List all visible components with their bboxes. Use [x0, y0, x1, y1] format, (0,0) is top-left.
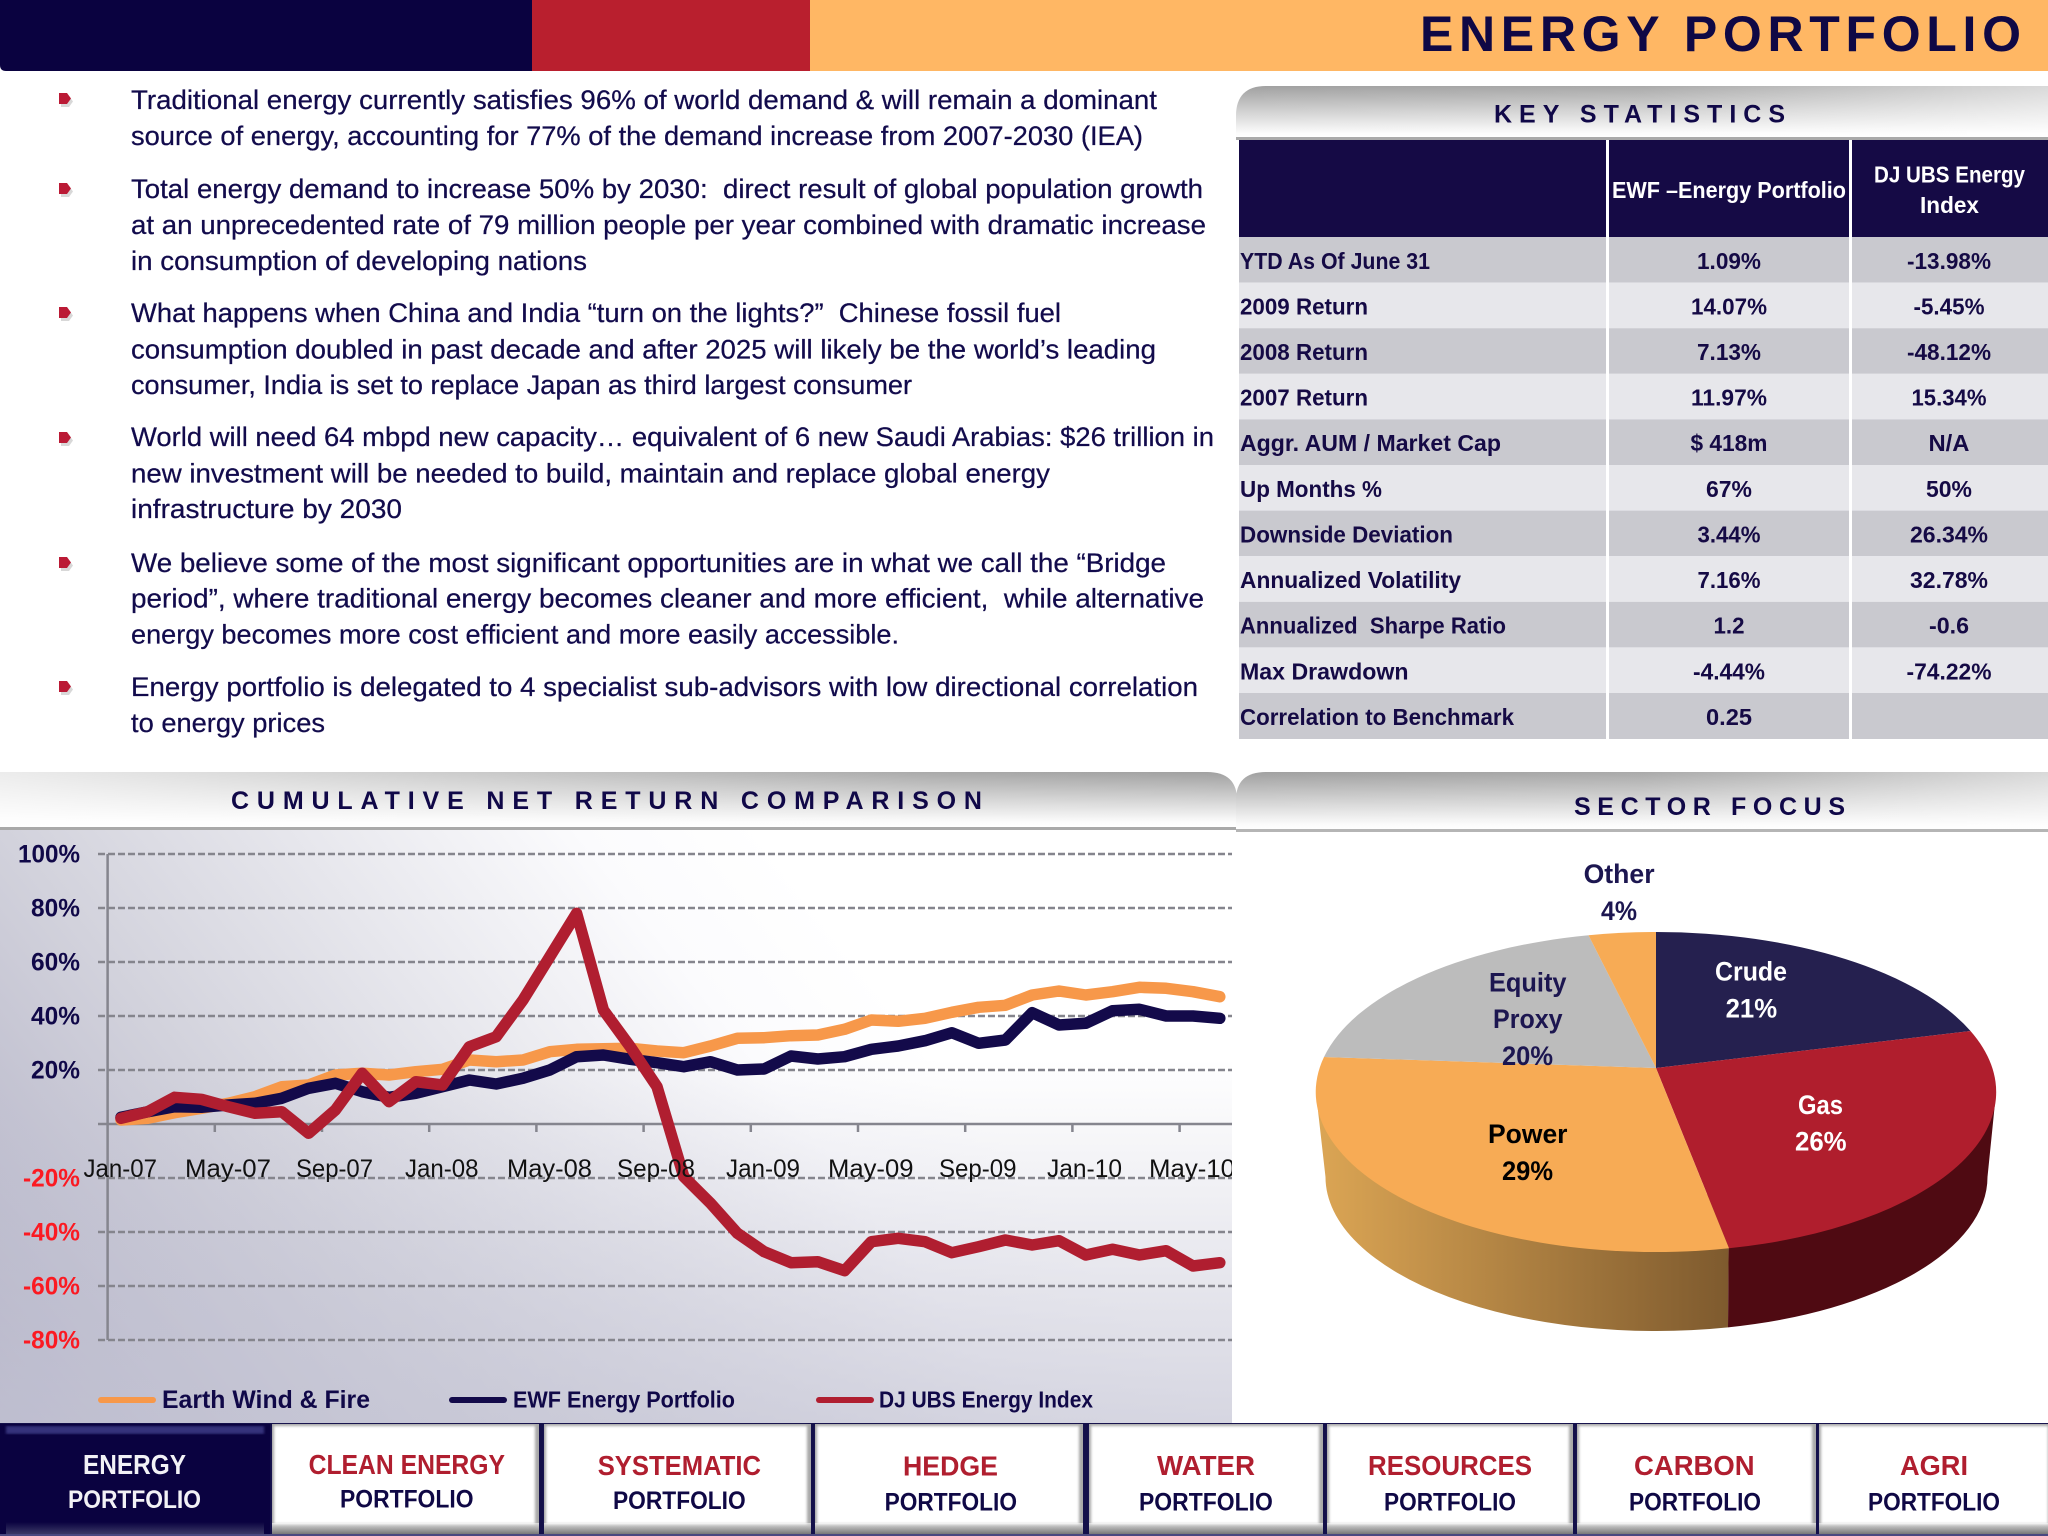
bullet 3	[59, 298, 1156, 400]
label: gas: 26%	[1795, 1127, 1847, 1157]
row: 2008 return: 2008 Return	[1240, 339, 1368, 365]
y axis labels: -60%	[23, 1272, 80, 1300]
button: carbon: PORTFOLIO	[1629, 1489, 1761, 1517]
panel: sector focus header: SECTOR FOCUS	[1574, 793, 1845, 821]
row: 2009 return	[1240, 294, 1984, 320]
bullet 5: energy becomes more cost efficient and more easily accessible.	[131, 620, 899, 650]
title: ENERGY PORTFOLIO	[1420, 6, 2021, 62]
series: Earth Wind & Fire	[121, 987, 1220, 1120]
x axis labels: May-10	[1149, 1155, 1235, 1183]
legend: EWF Energy Portfolio	[513, 1386, 735, 1412]
label: equity proxy	[1489, 968, 1566, 1071]
y axis labels: 40%	[31, 1002, 80, 1030]
x axis labels: May-07	[185, 1155, 271, 1183]
button: energy (active)	[0, 1424, 270, 1534]
button: clean energy	[272, 1424, 539, 1534]
button: clean energy: PORTFOLIO	[340, 1486, 474, 1514]
row: correlation: 0.25	[1706, 704, 1752, 730]
row: up months: 50%	[1926, 476, 1972, 502]
bullet 3: consumer, India is set to replace Japan as third largest consumer	[131, 370, 912, 400]
y axis labels: -40%	[23, 1218, 80, 1246]
label: crude: Crude	[1715, 957, 1787, 987]
button: systematic: SYSTEMATIC	[598, 1450, 761, 1481]
button: hedge: HEDGE	[903, 1451, 998, 1482]
row: drawdown: -4.44%	[1693, 658, 1765, 684]
bullet 1: Traditional energy currently satisfies 96% of world demand & will remain a dominant	[131, 85, 1158, 115]
row: 2008 return	[1240, 339, 1991, 365]
row: AUM: N/A	[1928, 430, 1970, 456]
slice: equity proxy	[1324, 935, 1656, 1068]
y axis labels: 80%	[31, 894, 80, 922]
x axis labels: Sep-08	[617, 1155, 695, 1183]
row: AUM	[1240, 430, 1970, 456]
label: equity proxy: Proxy	[1493, 1004, 1563, 1034]
bullet 1	[59, 85, 1158, 151]
panel: key statistics table	[1239, 140, 2048, 739]
panel: cumulative net return header	[0, 772, 1237, 830]
x axis labels: Jan-07	[84, 1155, 157, 1183]
row: 2008 return: -48.12%	[1907, 339, 1991, 365]
row: sharpe: 1.2	[1714, 612, 1744, 638]
button: hedge: PORTFOLIO	[885, 1489, 1017, 1517]
row: 2009 return: 14.07%	[1691, 294, 1767, 320]
slice: power	[1316, 1057, 1729, 1252]
table header: Index	[1920, 192, 1979, 218]
header band	[0, 0, 2048, 71]
row: drawdown: -74.22%	[1906, 658, 1992, 684]
row: sharpe: Annualized Sharpe Ratio	[1240, 612, 1506, 638]
slice: gas	[1656, 1031, 1996, 1248]
row: YTD: 1.09%	[1697, 248, 1761, 274]
button: carbon: CARBON	[1634, 1450, 1755, 1481]
row: 2007 return	[1240, 385, 1986, 411]
slice: crude	[1656, 932, 1970, 1068]
button: agri: PORTFOLIO	[1868, 1489, 2000, 1517]
bullet 1: source of energy, accounting for 77% of the demand increase from 2007-2030 (IEA)	[131, 121, 1143, 151]
row: downside deviation: 3.44%	[1698, 521, 1760, 547]
pie side: power	[1316, 1093, 1729, 1331]
label: gas: Gas	[1798, 1090, 1843, 1120]
panel: key statistics header: KEY STATISTICS	[1494, 101, 1785, 129]
button: energy (active): ENERGY	[83, 1449, 186, 1480]
table header	[1239, 140, 2048, 237]
navigation bar	[0, 1423, 2048, 1536]
y axis labels: 100%	[18, 840, 80, 868]
panel: cumulative net return header: CUMULATIVE NET RETURN COMPARISON	[231, 787, 982, 815]
button: hedge	[815, 1424, 1083, 1534]
bullet 5: period”, where traditional energy becomes cleaner and more efficient, while alternative	[131, 584, 1204, 614]
button: agri	[1819, 1424, 2048, 1534]
label: other	[1584, 859, 1655, 926]
bullet 4: infrastructure by 2030	[131, 494, 402, 524]
label: gas	[1795, 1090, 1847, 1157]
panel: key statistics header	[1236, 86, 2048, 140]
row: YTD: YTD As Of June 31	[1240, 248, 1430, 274]
slice: other	[1588, 932, 1656, 1068]
row: YTD	[1240, 248, 1991, 274]
legend: DJ UBS Energy Index	[879, 1386, 1093, 1412]
bullet 6: to energy prices	[131, 708, 325, 738]
bullet 2: Total energy demand to increase 50% by 2030: direct result of global population growth	[131, 174, 1203, 204]
row: volatility	[1240, 567, 1988, 593]
row: 2007 return: 15.34%	[1912, 385, 1986, 411]
button: water: PORTFOLIO	[1139, 1489, 1273, 1517]
pie side: gas	[1728, 1093, 1996, 1327]
button: water: WATER	[1157, 1450, 1255, 1481]
row: AUM: Aggr. AUM / Market Cap	[1240, 430, 1501, 456]
y axis labels: -80%	[23, 1326, 80, 1354]
button: resources: RESOURCES	[1368, 1450, 1532, 1481]
label: power: 29%	[1502, 1156, 1553, 1186]
row: volatility: Annualized Volatility	[1240, 567, 1461, 593]
bullet 5	[59, 548, 1204, 650]
button: carbon	[1577, 1424, 1816, 1534]
bullet 2: at an unprecedented rate of 79 million people per year combined with dramatic increase	[131, 210, 1206, 240]
panel: line chart	[0, 830, 1235, 1424]
row: up months	[1240, 476, 1972, 502]
row: up months: Up Months %	[1240, 476, 1382, 502]
panel: pie chart	[1316, 859, 1996, 1331]
x axis labels: Jan-08	[405, 1155, 478, 1183]
row: drawdown: Max Drawdown	[1240, 658, 1408, 684]
y axis labels	[18, 840, 80, 1354]
bullet 6: Energy portfolio is delegated to 4 specialist sub-advisors with low directional correlation	[131, 672, 1198, 702]
legend: Earth Wind & Fire	[162, 1386, 370, 1414]
bullet 4	[59, 422, 1214, 524]
row: 2007 return: 11.97%	[1691, 385, 1767, 411]
button: systematic: PORTFOLIO	[613, 1487, 746, 1515]
label: power	[1488, 1119, 1568, 1186]
x axis labels: May-09	[828, 1155, 914, 1183]
panel: sector focus header	[1236, 772, 2048, 832]
x axis labels: Jan-10	[1047, 1155, 1122, 1183]
row: 2009 return: 2009 Return	[1240, 294, 1368, 320]
row: volatility: 7.16%	[1698, 567, 1760, 593]
label: equity proxy: 20%	[1502, 1041, 1553, 1071]
table header: DJ UBS Energy	[1874, 162, 2025, 188]
y axis labels: -20%	[23, 1164, 80, 1192]
bullet 2	[59, 174, 1206, 276]
table header: EWF –Energy Portfolio	[1612, 177, 1846, 203]
button: clean energy: CLEAN ENERGY	[309, 1449, 505, 1480]
row: 2008 return: 7.13%	[1697, 339, 1761, 365]
x axis labels	[84, 1159, 1232, 1182]
text block: bullet points	[59, 85, 1214, 738]
row: downside deviation	[1240, 521, 1988, 547]
x axis labels: May-08	[507, 1155, 592, 1183]
row: correlation: Correlation to Benchmark	[1240, 704, 1514, 730]
button: agri: AGRI	[1900, 1450, 1968, 1481]
row: downside deviation: Downside Deviation	[1240, 521, 1453, 547]
button: water	[1089, 1424, 1323, 1534]
row: sharpe	[1240, 612, 1969, 638]
bullet 3: What happens when China and India “turn on the lights?” Chinese fossil fuel	[131, 298, 1061, 328]
bullet 4: World will need 64 mbpd new capacity… equivalent of 6 new Saudi Arabias: $26 trillion in	[131, 422, 1214, 452]
label: power: Power	[1488, 1119, 1568, 1149]
label: crude: 21%	[1726, 994, 1777, 1024]
label: crude	[1715, 957, 1787, 1024]
series: DJ UBS Energy Index	[121, 913, 1220, 1271]
row: AUM: $ 418m	[1690, 430, 1768, 456]
legend	[98, 1386, 1093, 1414]
bullet 4: new investment will be needed to build, maintain and replace global energy	[131, 458, 1051, 488]
row: downside deviation: 26.34%	[1910, 521, 1988, 547]
bullet 3: consumption doubled in past decade and after 2025 will likely be the world’s leading	[131, 334, 1156, 364]
row: correlation	[1240, 704, 1752, 730]
row: sharpe: -0.6	[1929, 612, 1969, 638]
y axis labels: 60%	[31, 948, 80, 976]
button: systematic	[544, 1424, 811, 1534]
label: equity proxy: Equity	[1489, 968, 1566, 998]
bullet 6	[59, 672, 1198, 738]
row: drawdown	[1240, 658, 1992, 684]
button: energy (active): PORTFOLIO	[68, 1486, 201, 1514]
x axis labels: Sep-07	[296, 1155, 373, 1183]
row: 2007 return: 2007 Return	[1240, 385, 1368, 411]
row: up months: 67%	[1706, 476, 1752, 502]
x axis labels: Jan-09	[726, 1155, 800, 1183]
series: EWF Energy Portfolio	[121, 1009, 1220, 1117]
button: resources: PORTFOLIO	[1384, 1489, 1516, 1517]
bullet 2: in consumption of developing nations	[131, 246, 587, 276]
x axis labels: Sep-09	[939, 1155, 1016, 1183]
label: other: 4%	[1601, 896, 1637, 926]
button: resources	[1327, 1424, 1573, 1534]
y axis labels: 20%	[31, 1056, 80, 1084]
bullet 5: We believe some of the most significant opportunities are in what we call the “Bridge	[131, 548, 1166, 578]
label: other: Other	[1584, 859, 1655, 889]
row: YTD: -13.98%	[1907, 248, 1991, 274]
row: 2009 return: -5.45%	[1914, 294, 1984, 320]
row: volatility: 32.78%	[1910, 567, 1988, 593]
